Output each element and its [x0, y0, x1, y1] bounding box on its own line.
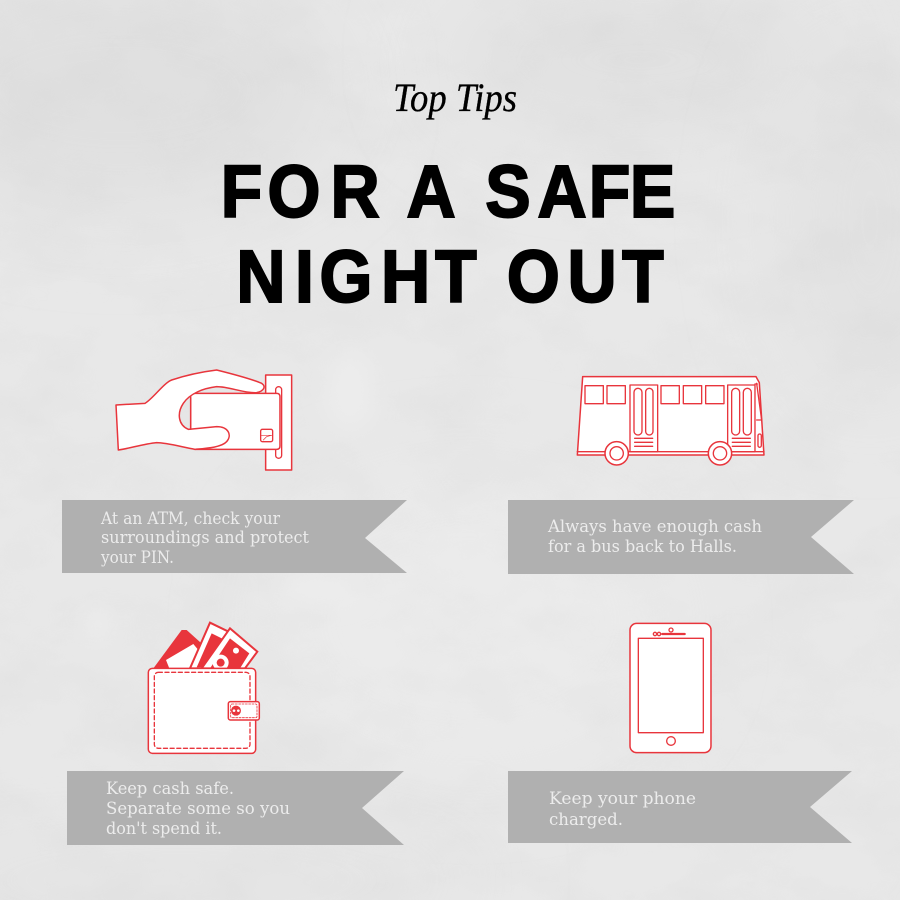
title — [221, 151, 675, 319]
ribbon: ATM tip — [62, 500, 407, 573]
ribbon: phone tip — [508, 771, 852, 843]
title: FOR A SAFE — [221, 151, 675, 234]
icon: smartphone — [630, 623, 711, 753]
ribbon: ATM tip: your PIN. — [100, 548, 174, 567]
ribbon: cash tip: Separate some so you — [106, 799, 290, 818]
ribbon: phone tip: charged. — [549, 810, 623, 829]
icon: bus — [577, 377, 764, 465]
subtitle: Top Tips: Top Tips — [393, 75, 517, 120]
ribbon: bus tip: Always have enough cash — [547, 517, 762, 536]
ribbon: cash tip — [67, 771, 404, 845]
ribbon: cash tip: Keep cash safe. — [106, 779, 234, 798]
ribbon: ATM tip: At an ATM, check your — [100, 509, 280, 528]
ribbon: bus tip: for a bus back to Halls. — [548, 537, 737, 556]
icon: hand inserting card into ATM — [116, 370, 292, 470]
ribbon: cash tip: don't spend it. — [106, 819, 222, 838]
title: NIGHT OUT — [236, 236, 664, 319]
icon: wallet with cash — [148, 623, 259, 753]
ribbon: bus tip — [508, 500, 854, 574]
ribbon: phone tip: Keep your phone — [549, 789, 696, 808]
ribbon: ATM tip: surroundings and protect — [101, 528, 309, 547]
